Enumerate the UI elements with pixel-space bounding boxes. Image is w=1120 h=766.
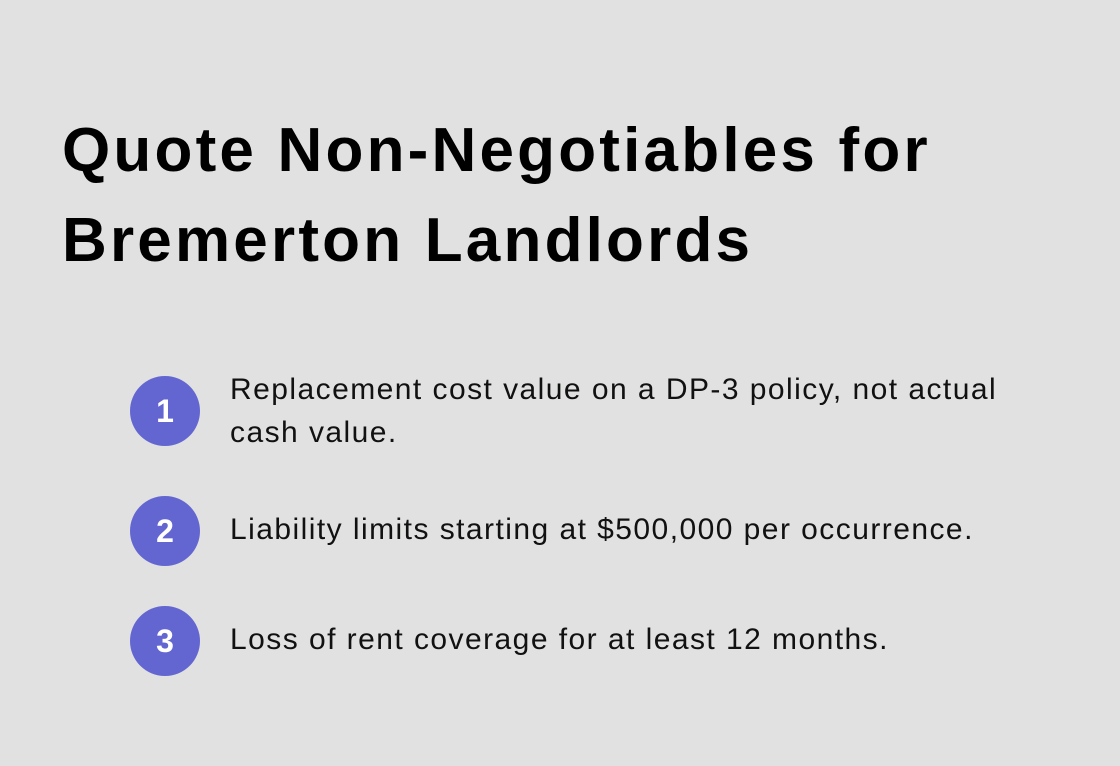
text 1: Replacement cost value on a DP-3 policy, not actual	[230, 373, 997, 406]
item 2	[130, 496, 974, 566]
item 1	[130, 373, 997, 449]
title: Quote Non-Negotiables for	[62, 116, 931, 185]
badge 2	[130, 496, 200, 566]
text 1: cash value.	[230, 416, 398, 449]
item 3	[130, 606, 889, 676]
badge 3: 3	[156, 623, 174, 659]
text 3: Loss of rent coverage for at least 12 months.	[230, 623, 889, 656]
badge 2: 2	[156, 513, 174, 549]
text 1	[230, 373, 997, 449]
title	[62, 116, 931, 275]
title: Bremerton Landlords	[62, 206, 753, 275]
badge 3	[130, 606, 200, 676]
badge 1	[130, 376, 200, 446]
text 2: Liability limits starting at $500,000 per occurrence.	[230, 513, 974, 546]
badge 1: 1	[156, 393, 174, 429]
